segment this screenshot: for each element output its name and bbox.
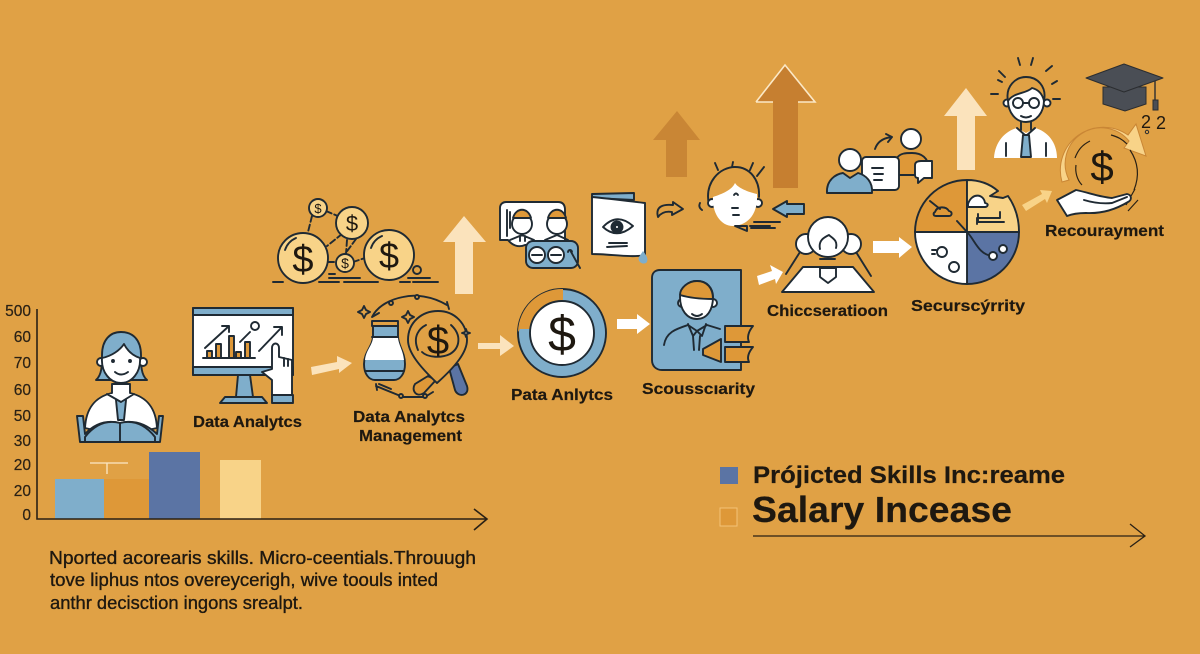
icon: coin network: $ — [341, 255, 349, 271]
icon: dollar donut — [518, 289, 606, 377]
icon: graduation cap — [1086, 64, 1166, 134]
legend — [720, 462, 1145, 547]
arrow: blue left — [773, 201, 804, 217]
legend arrow — [753, 524, 1145, 547]
bar chart — [5, 303, 487, 530]
legend label: salary: Salary Incease — [752, 489, 1012, 530]
label: data analytics management: Management — [359, 428, 463, 445]
arrow: small brown up — [653, 111, 700, 177]
icon: dollar donut: $ — [548, 306, 576, 362]
arrow: to donut — [478, 335, 514, 356]
legend swatch: skills — [720, 467, 738, 484]
arrow: to card — [617, 314, 650, 334]
arrow outline — [756, 65, 815, 102]
icon: graduation cap: 2 — [1156, 113, 1166, 133]
arrow: to flask — [311, 356, 352, 375]
arrow: curved right — [657, 202, 683, 217]
label: pata analytics: Pata Anlytcs — [511, 387, 613, 404]
icon: thinking face — [699, 162, 780, 231]
chart description text: anthr decisction ingons srealpt. — [50, 593, 303, 613]
icon: coin network — [273, 199, 438, 283]
legend label: skills: Prójicted Skills Inc:reame — [753, 462, 1065, 489]
icon: analytics monitor with hand — [193, 308, 293, 403]
label: data analytics: Data Analytcs — [193, 414, 302, 431]
label: chiccseration: Chiccseratioon — [767, 303, 888, 320]
y axis labels: 30 — [14, 433, 31, 450]
icon: quadrant pie — [915, 180, 1019, 284]
arrow: to teacher — [757, 265, 783, 285]
bars — [55, 452, 261, 519]
y axis labels: 0 — [22, 507, 31, 524]
icon: coin network: $ — [292, 239, 314, 281]
icon: flask and magnifier: $ — [427, 319, 449, 363]
arrow: to recouperation — [1022, 190, 1052, 211]
icon: person reading book — [77, 332, 163, 442]
chart description text — [49, 548, 476, 613]
icon: document with eye — [592, 193, 647, 264]
icon: dollar cycle in hand: $ — [1090, 143, 1114, 190]
icon: person with glasses — [991, 58, 1060, 158]
icon: graduation cap: 2 — [1141, 112, 1151, 132]
y axis labels — [5, 303, 31, 524]
label: recouperment: Recourayment — [1045, 223, 1165, 240]
arrow: light up — [944, 88, 987, 170]
icon: flask and magnifier — [358, 295, 470, 398]
y axis labels: 70 — [14, 355, 31, 372]
arrow: big brown up — [756, 65, 815, 188]
icon: coin network: $ — [379, 235, 399, 276]
icon: coin network: $ — [314, 201, 322, 216]
icon: coin network: $ — [346, 211, 358, 236]
icon: video meeting — [500, 202, 580, 268]
label: data analytics management — [353, 409, 465, 445]
legend swatch: salary — [720, 508, 737, 526]
y axis labels: 50 — [14, 408, 31, 425]
icon: seated person — [782, 217, 874, 292]
y axis labels: 500 — [5, 303, 31, 320]
label: scousscarity: Scousscıarity — [642, 381, 755, 398]
y axis labels: 60 — [14, 329, 31, 346]
chart description text: Nported acorearis skills. Micro-ceentials.Throuugh — [49, 548, 476, 568]
chart description text: tove liphus ntos overeycerigh, wive toouls inted — [50, 570, 438, 590]
label: data analytics management: Data Analytcs — [353, 409, 465, 426]
icon: dollar cycle in hand — [1057, 124, 1146, 216]
y axis labels: 20 — [14, 483, 31, 500]
y axis labels: 20 — [14, 457, 31, 474]
label: securscyrrity: Securscýrrity — [911, 298, 1025, 315]
arrow: cream up — [443, 216, 486, 294]
icon: two people talking — [827, 129, 932, 193]
y axis labels: 60 — [14, 382, 31, 399]
arrow: to pie — [873, 237, 912, 258]
axes — [37, 309, 487, 530]
icon: profile card — [652, 270, 753, 370]
